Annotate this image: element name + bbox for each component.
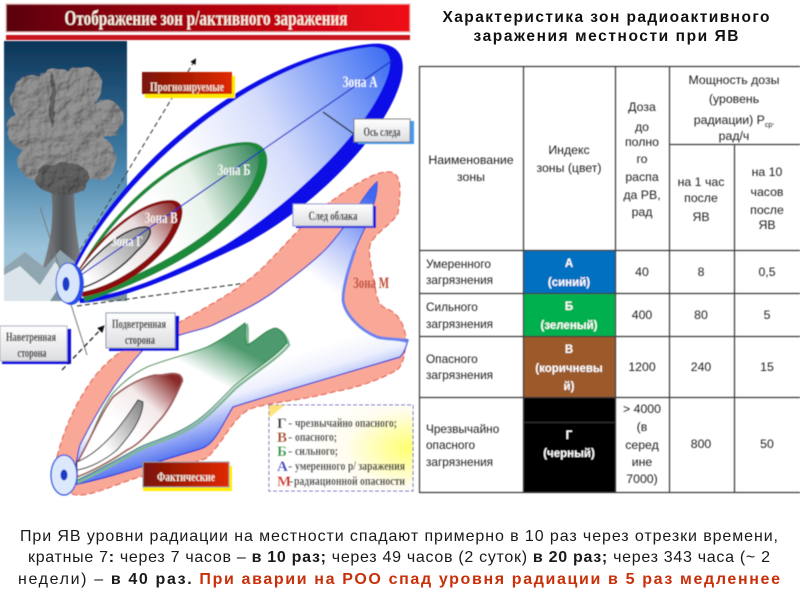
row: strong: Сильного <box>426 300 478 314</box>
row: extremely dangerous: 50 <box>760 437 774 451</box>
table header <box>428 73 784 232</box>
wind line <box>40 207 87 355</box>
row: extremely dangerous: (в <box>637 420 647 434</box>
table header: на 1 час <box>678 175 724 189</box>
arrow: upper wind direction <box>80 60 195 250</box>
table header: , <box>772 119 774 126</box>
diagram: radioactive contamination zones <box>0 4 414 495</box>
legend: - <box>288 415 292 430</box>
zone G forecast <box>80 227 150 288</box>
zone V forecast <box>78 200 182 297</box>
table header: после <box>684 191 718 205</box>
row: dangerous: 1200 <box>628 360 656 374</box>
text block: radiation decay note: недели) – в 40 раз. При аварии на РОО спад уровня радиации в 5 раз медленнее <box>18 571 780 588</box>
table header: Мощность дозы <box>689 73 779 87</box>
legend: М <box>277 474 291 490</box>
table: zone characteristics <box>419 66 800 492</box>
table header: ЯВ <box>692 210 710 224</box>
legend: опасного; <box>295 429 337 444</box>
label: leeward side <box>106 313 179 351</box>
label: leeward side: Подветренная <box>112 316 166 331</box>
label: cloud trace: След облака <box>308 209 358 223</box>
label: windward side <box>0 326 71 364</box>
table header: на 10 <box>752 165 783 179</box>
label: forecast <box>142 72 235 98</box>
row: dangerous: загрязнения <box>426 368 493 382</box>
zone G actual <box>77 400 143 470</box>
table header: го <box>636 152 648 166</box>
row: strong: 400 <box>632 308 652 322</box>
row: extremely dangerous: 800 <box>691 437 711 451</box>
trace axis <box>68 60 393 284</box>
arrow: wind direction <box>62 327 103 370</box>
label: windward side: Наветренная <box>6 329 56 344</box>
label: cloud trace <box>293 204 376 228</box>
row: extremely dangerous: Чрезвычайно <box>426 422 500 436</box>
label: actual <box>143 462 232 491</box>
label: trace axis: Ось следа <box>364 125 401 139</box>
legend: Г <box>277 416 287 432</box>
row: moderate: 0,5 <box>758 265 776 279</box>
row: moderate <box>426 257 776 289</box>
row: moderate: (синий) <box>548 277 590 289</box>
text block: radiation decay note <box>18 528 780 588</box>
row: extremely dangerous: ине <box>632 455 652 469</box>
zone A forecast <box>72 44 403 303</box>
legend: радиационной опасности <box>294 473 405 488</box>
table header: после <box>750 203 784 217</box>
table header: полно <box>625 135 659 149</box>
table header: до <box>635 120 649 134</box>
legend: - <box>288 443 292 458</box>
legend: Б <box>277 444 287 460</box>
table header: рад <box>632 205 652 219</box>
explosion centre actual <box>51 455 77 495</box>
legend <box>269 405 413 491</box>
table header: Доза <box>628 100 656 114</box>
photo: mushroom cloud <box>4 41 127 301</box>
table header: часов <box>751 185 783 199</box>
row: extremely dangerous: загрязнения <box>426 455 493 469</box>
arrow: trace axis leader <box>323 112 354 134</box>
text block: radiation decay note: кратные 7: через 7 часов – в 10 раз; через 49 часов (2 суток) в 20 раз; через 343 часа (~ 2 <box>28 549 770 566</box>
row: extremely dangerous: Г <box>566 430 573 442</box>
legend: сильного; <box>295 443 338 458</box>
row: moderate: Умеренного <box>426 257 491 271</box>
table header: да РВ, <box>623 188 661 202</box>
zone labels: Зона Г <box>111 234 143 250</box>
row: dangerous: Опасного <box>426 352 478 366</box>
title banner: Отображение зон р/активного заражения <box>64 6 348 30</box>
legend: В <box>277 430 287 446</box>
row: strong: 5 <box>764 308 771 322</box>
explosion centre forecast <box>56 263 84 305</box>
row: moderate: А <box>565 258 573 270</box>
zone A actual <box>73 182 408 485</box>
row: dangerous: В <box>565 344 573 356</box>
heading: table title: Характеристика зон радиоактивного <box>442 9 770 26</box>
row: strong <box>426 300 771 332</box>
table header: зоны <box>457 170 485 184</box>
table header: зоны (цвет) <box>536 161 602 175</box>
legend: - <box>289 473 293 488</box>
row: moderate: 8 <box>698 265 705 279</box>
table header: Наименование <box>428 153 514 167</box>
table header: распа <box>625 170 659 184</box>
table header: радиации) Р <box>694 113 765 127</box>
zone labels <box>111 74 389 292</box>
label: trace axis <box>354 119 414 144</box>
zone B forecast <box>76 142 267 302</box>
zone labels: Зона М <box>353 275 389 292</box>
table header: рад/ч <box>719 129 749 143</box>
row: dangerous <box>426 344 774 393</box>
heading: table title: заражения местности при ЯВ <box>474 28 738 45</box>
label: windward side: сторона <box>18 345 47 360</box>
row: extremely dangerous: > 4000 <box>623 402 661 416</box>
zone B actual <box>77 323 289 482</box>
zone labels: Зона Б <box>218 162 250 179</box>
legend: умеренного р/ заражения <box>295 458 405 473</box>
table grid <box>419 66 800 492</box>
heading: table title <box>442 9 770 45</box>
row: extremely dangerous: серед <box>625 438 659 452</box>
legend: - <box>288 429 292 444</box>
zone labels: Зона А <box>342 74 378 91</box>
row: dangerous: 240 <box>691 360 711 374</box>
table header: (уровень <box>709 92 759 106</box>
table header: Индекс <box>548 143 590 157</box>
label: actual: Фактические <box>157 469 215 484</box>
legend: - <box>288 458 292 473</box>
zone V actual <box>77 373 182 477</box>
row: strong: Б <box>565 301 573 313</box>
row: strong: 80 <box>694 308 708 322</box>
zone M actual <box>57 172 406 495</box>
title banner <box>6 4 410 40</box>
row: strong: загрязнения <box>426 317 493 331</box>
row: moderate: загрязнения <box>426 273 493 287</box>
legend: А <box>277 459 288 475</box>
text block: radiation decay note: При ЯВ уровни радиации на местности спадают примерно в 10 раз через отрезки времени, <box>20 528 778 545</box>
label: forecast: Прогнозируемые <box>150 79 224 94</box>
zone labels: Зона В <box>144 210 178 227</box>
row: dangerous: й) <box>564 381 575 393</box>
legend: чрезвычайно опасного; <box>295 415 397 430</box>
row: extremely dangerous: опасного <box>426 438 476 452</box>
row: dangerous: (коричневы <box>535 363 603 375</box>
zone color cells <box>524 250 615 492</box>
arrow: to leeward right <box>77 278 283 306</box>
table header: ЯВ <box>758 218 776 232</box>
table header: ср <box>765 122 772 129</box>
row: dangerous: 15 <box>760 360 774 374</box>
row: extremely dangerous: 7000) <box>626 472 658 486</box>
row: strong: (зеленый) <box>540 320 598 332</box>
row: moderate: 40 <box>635 265 649 279</box>
row: extremely dangerous: (черный) <box>543 448 595 460</box>
label: leeward side: сторона <box>125 332 155 347</box>
row: extremely dangerous <box>426 402 774 486</box>
